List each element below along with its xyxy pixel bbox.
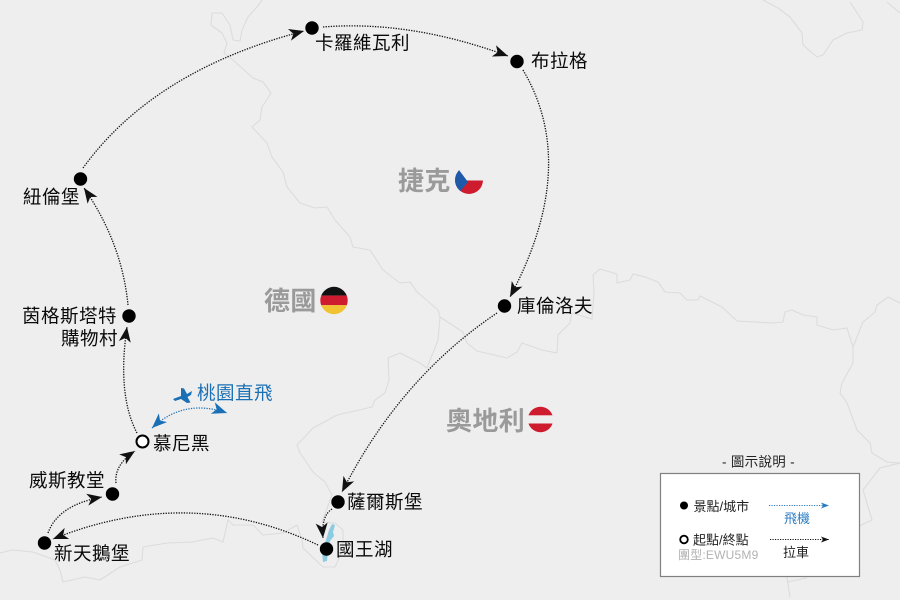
route: Karlovy Vary to Prague (323, 26, 508, 56)
icon: plane (173, 388, 192, 403)
stop: Ingolstadt Village (22, 306, 136, 349)
stop: Munich (start and end): 慕尼黑 (153, 433, 210, 454)
country: Austria (446, 406, 552, 432)
route: Ingolstadt to Nuremberg (84, 188, 128, 305)
stop: Nuremberg (23, 172, 87, 208)
route: Krumlov to Salzburg (342, 313, 497, 492)
route: Prague to Krumlov (510, 70, 549, 297)
label: direct flight from Taoyuan: 桃園直飛 (197, 382, 273, 404)
route: Nuremberg to Karlovy Vary (83, 31, 304, 168)
country: Austria: 奧地利 (446, 406, 525, 436)
route: Salzburg to Königssee (323, 509, 332, 538)
country: Germany (264, 286, 348, 316)
stop: Prague: 布拉格 (531, 50, 588, 72)
stop: Nuremberg: 紐倫堡 (23, 186, 80, 208)
stop: Karlovy Vary (305, 21, 410, 54)
country: Czech Republic: 捷克 (398, 166, 451, 196)
route: Munich to Ingolstadt (124, 327, 137, 433)
legend: coach arrow: 拉車 (783, 545, 809, 560)
route: direct flight double arrow (152, 408, 227, 428)
stop: Salzburg: 薩爾斯堡 (347, 492, 423, 512)
legend box (660, 474, 860, 576)
stop: Cesky Krumlov: 庫倫洛夫 (517, 296, 593, 316)
stop: Neuschwanstein (38, 536, 130, 564)
legend: coach arrow (770, 540, 829, 560)
route: Königssee to Neuschwanstein (53, 513, 318, 545)
legend (660, 454, 860, 576)
legend: start and end: 起點/終點 (693, 532, 749, 548)
stop: Ingolstadt Village: 茵格斯塔特 (22, 306, 117, 326)
legend: tour code: 團型:EWU5M9 (678, 548, 759, 562)
stop: Ingolstadt Village: 購物村 (61, 328, 118, 349)
legend: flight arrow (769, 506, 829, 526)
legend: attraction dot: 景點/城市 (694, 499, 749, 514)
route: Neuschwanstein to Wieskirche (48, 497, 102, 533)
country: Czech Republic (398, 168, 483, 194)
stop: Neuschwanstein: 新天鵝堡 (54, 543, 130, 564)
stop: Königssee: 國王湖 (336, 539, 393, 560)
legend: flight arrow: 飛機 (784, 511, 810, 526)
country: Germany: 德國 (264, 286, 317, 316)
lake: Königssee (322, 524, 335, 562)
stop: Karlovy Vary: 卡羅維瓦利 (315, 32, 410, 54)
legend title: - 圖示說明 - (722, 454, 795, 470)
stop: Wieskirche (29, 470, 119, 501)
route: Wieskirche to Munich (116, 451, 135, 483)
stop: Wieskirche: 威斯教堂 (29, 470, 105, 491)
